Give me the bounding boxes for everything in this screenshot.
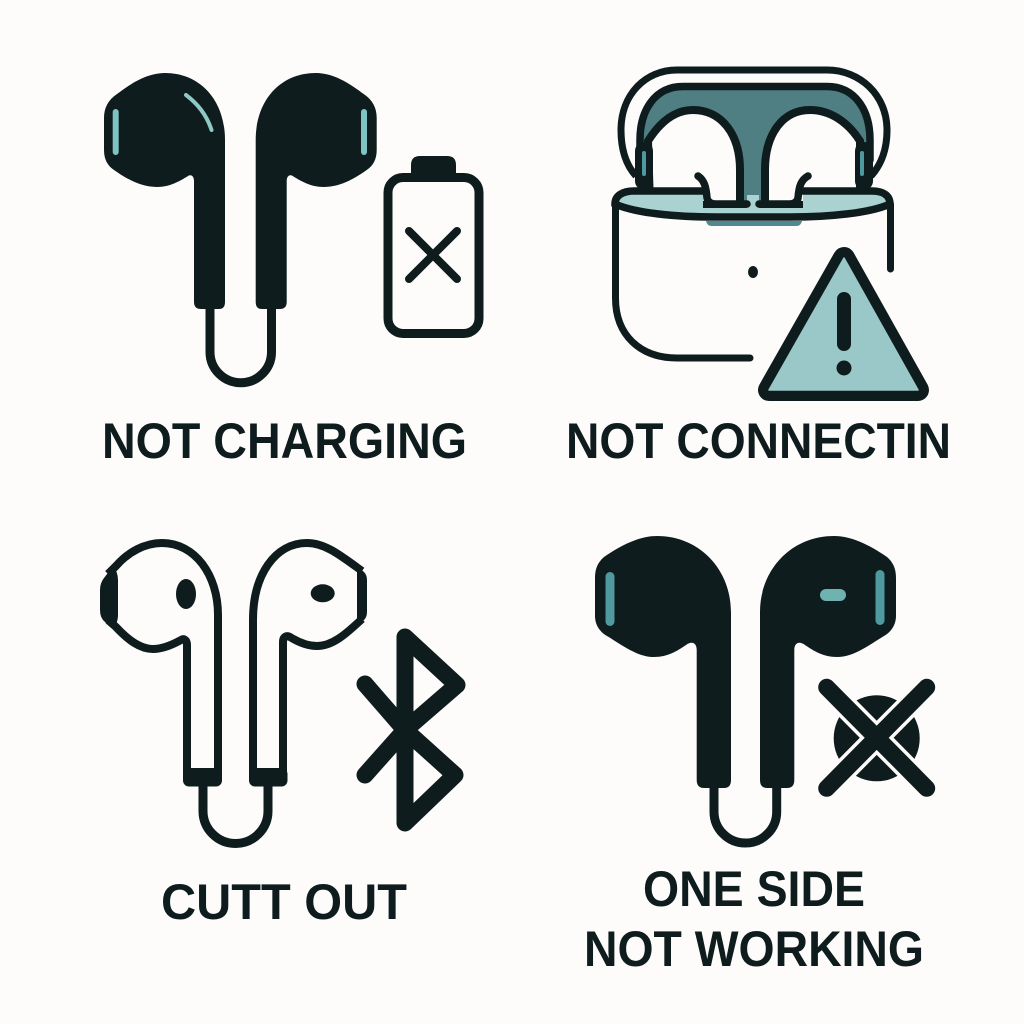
panel: not charging	[102, 73, 479, 469]
panel: cutting out	[100, 543, 457, 930]
panel: not connecting	[566, 70, 951, 469]
icon: charging case with open lid	[615, 70, 890, 358]
icon: wired earbuds, outline	[100, 543, 367, 844]
label: one side not working: NOT WORKING	[584, 921, 924, 977]
label: one side not working	[584, 861, 924, 977]
panel: one side not working	[584, 536, 927, 977]
label: not connecting: NOT CONNECTIN	[566, 413, 951, 469]
icon: battery with cross	[388, 156, 479, 334]
icon: wired earbuds, solid	[104, 73, 377, 383]
icon: wired earbuds, solid with teal accents	[595, 536, 896, 843]
label: one side not working: ONE SIDE	[643, 861, 865, 917]
icon: warning triangle	[769, 258, 918, 390]
label: not charging: NOT CHARGING	[102, 413, 467, 469]
icon: bluetooth symbol	[365, 637, 457, 823]
icon: crossed-out circle	[827, 687, 927, 788]
label: cutting out: CUTT OUT	[161, 874, 407, 930]
